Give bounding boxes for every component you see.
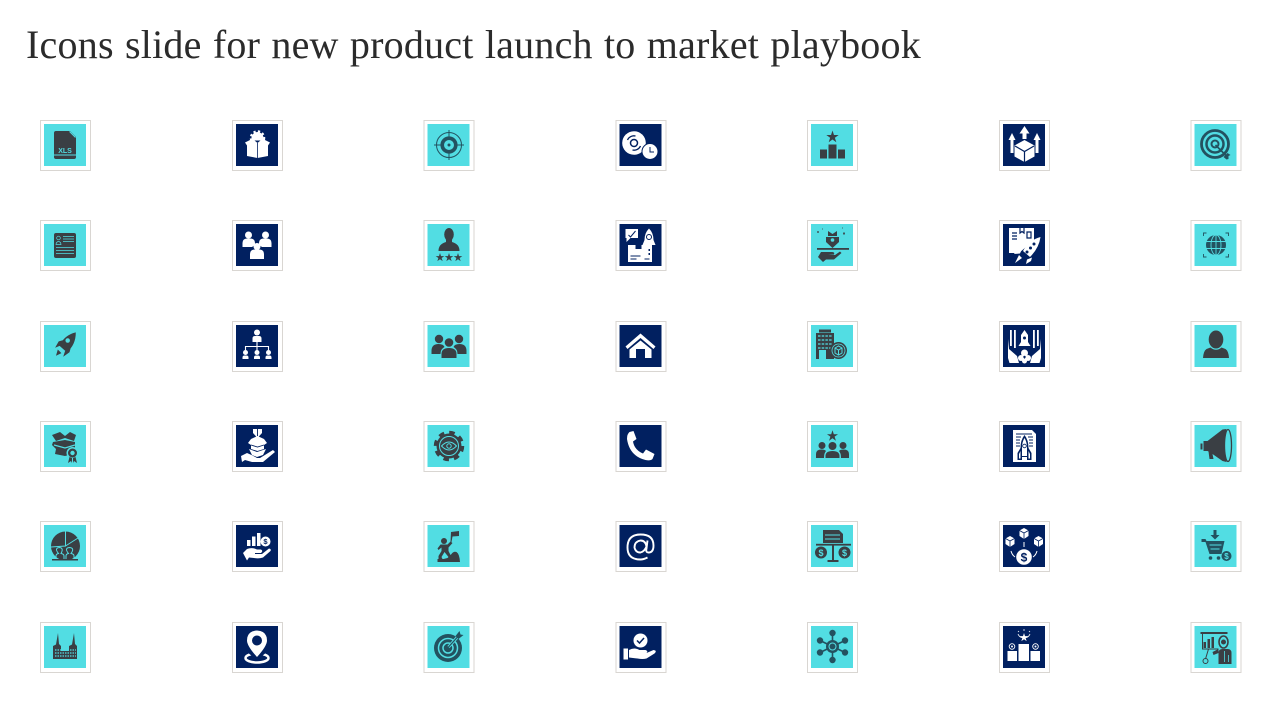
icon: hand with check mark <box>616 622 666 672</box>
icon: hand with chart and dollar <box>232 522 282 572</box>
icon: house <box>616 322 666 372</box>
icon: target with arrow <box>1191 120 1241 170</box>
icon: person <box>1191 322 1241 372</box>
icon: rocket between hands <box>1000 322 1050 372</box>
icon: group of three people <box>232 220 282 270</box>
icon: star on podium <box>808 120 858 170</box>
icon: awards podium <box>1000 622 1050 672</box>
icon: boxes to dollar <box>1000 522 1050 572</box>
icon: three people <box>424 322 474 372</box>
icon: hand with chart and dollar: $ <box>263 537 268 546</box>
icon: gear with eye <box>424 422 474 472</box>
icon: chat, rocket and box <box>616 220 666 270</box>
icon: boxes to dollar: $ <box>1021 550 1028 564</box>
icon: hub network <box>808 622 858 672</box>
icon: rocket <box>40 322 90 372</box>
icon: XLS file <box>40 120 90 170</box>
icon: cart with dollar <box>1191 522 1241 572</box>
icon: at sign <box>616 522 666 572</box>
icon: building and box <box>808 322 858 372</box>
icon: open box with ribbon badge <box>40 422 90 472</box>
icon: bullseye with arrow <box>424 622 474 672</box>
icon: climber with flag <box>424 522 474 572</box>
icon: org chart <box>232 322 282 372</box>
icon: presenter with chart <box>1191 622 1241 672</box>
icon: discs and clock <box>616 120 666 170</box>
icon: scale with money: $ <box>842 548 847 558</box>
icon: team with star <box>808 422 858 472</box>
icon: document with rocket <box>1000 422 1050 472</box>
icon: scale with money <box>808 522 858 572</box>
icon: scale with money: $ <box>818 548 824 558</box>
icon: XLS file: XLS <box>58 148 72 155</box>
icon: crosshair target <box>424 120 474 170</box>
icon: person with three stars <box>424 220 474 270</box>
icon: location pin <box>232 622 282 672</box>
icon: profile document <box>40 220 90 270</box>
icon: pie chart with people <box>40 522 90 572</box>
icon: box and rocket <box>1000 220 1050 270</box>
icon: hand holding boxes <box>232 422 282 472</box>
title: Icons slide for new product launch to market playbook <box>26 22 921 67</box>
icon: box with rising arrows <box>1000 120 1050 170</box>
icon: cart with dollar: $ <box>1224 552 1229 561</box>
icon: hand holding gift tray <box>808 220 858 270</box>
icon: megaphone <box>1191 422 1241 472</box>
icon: globe with focus brackets <box>1191 220 1241 270</box>
icon: phone <box>616 422 666 472</box>
icon: factory <box>40 622 90 672</box>
icon: box with gear <box>232 120 282 170</box>
